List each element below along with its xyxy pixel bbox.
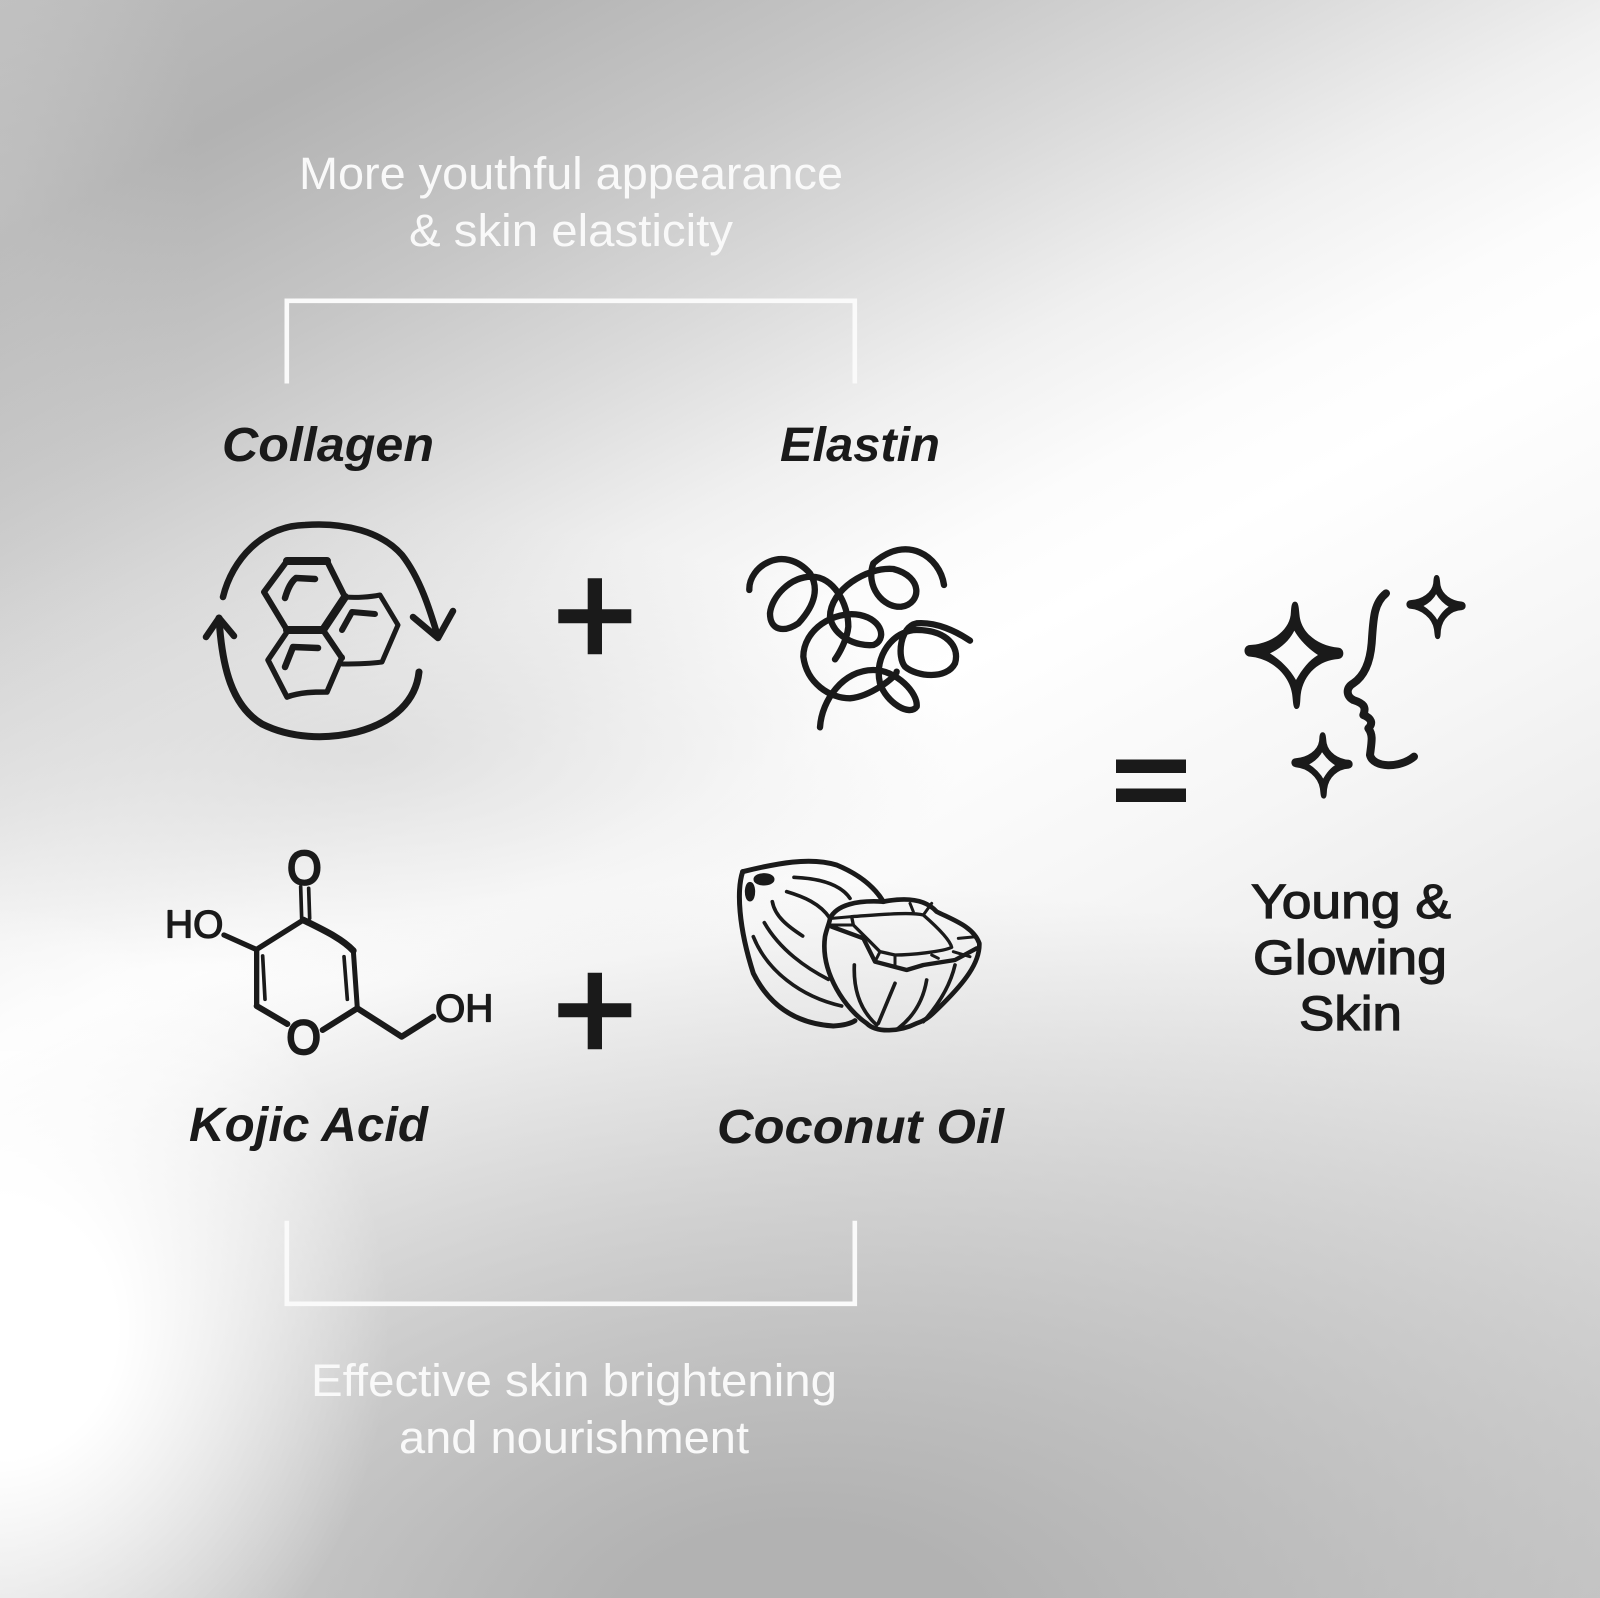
caption: bottom benefit: and nourishment <box>399 1412 750 1463</box>
operator: plus bottom <box>558 973 631 1049</box>
label: Collagen: Collagen <box>222 419 434 472</box>
operator: equals <box>1116 760 1186 802</box>
icon: collagen honeycomb with cycle arrows <box>206 524 453 737</box>
result label: Young and Glowing Skin <box>1251 876 1451 1041</box>
caption: bottom benefit <box>311 1355 837 1463</box>
bottom bracket <box>287 1221 855 1304</box>
operator: plus top <box>558 578 631 654</box>
label: Coconut Oil: Coconut Oil <box>717 1101 1006 1154</box>
icon: kojic acid molecule: O <box>287 1011 321 1064</box>
result label: Young and Glowing Skin: Young & <box>1251 876 1451 929</box>
label: Elastin: Elastin <box>780 419 940 472</box>
icon: elastin fibers <box>749 549 970 727</box>
label: Kojic Acid: Kojic Acid <box>189 1099 430 1152</box>
result label: Young and Glowing Skin: Glowing <box>1253 932 1447 985</box>
caption: top benefit: & skin elasticity <box>409 205 734 256</box>
icon: kojic acid molecule: HO <box>165 903 223 946</box>
icon: kojic acid molecule <box>165 842 493 1064</box>
caption: top benefit: More youthful appearance <box>299 148 843 199</box>
icon: glowing face profile with sparkles <box>1244 576 1465 798</box>
icon: kojic acid molecule: OH <box>435 988 493 1031</box>
caption: top benefit <box>299 148 843 256</box>
icon: coconut <box>739 861 979 1030</box>
result label: Young and Glowing Skin: Skin <box>1299 988 1402 1041</box>
caption: bottom benefit: Effective skin brightening <box>311 1355 837 1406</box>
top bracket <box>287 301 855 384</box>
icon: kojic acid molecule: O <box>287 842 321 895</box>
